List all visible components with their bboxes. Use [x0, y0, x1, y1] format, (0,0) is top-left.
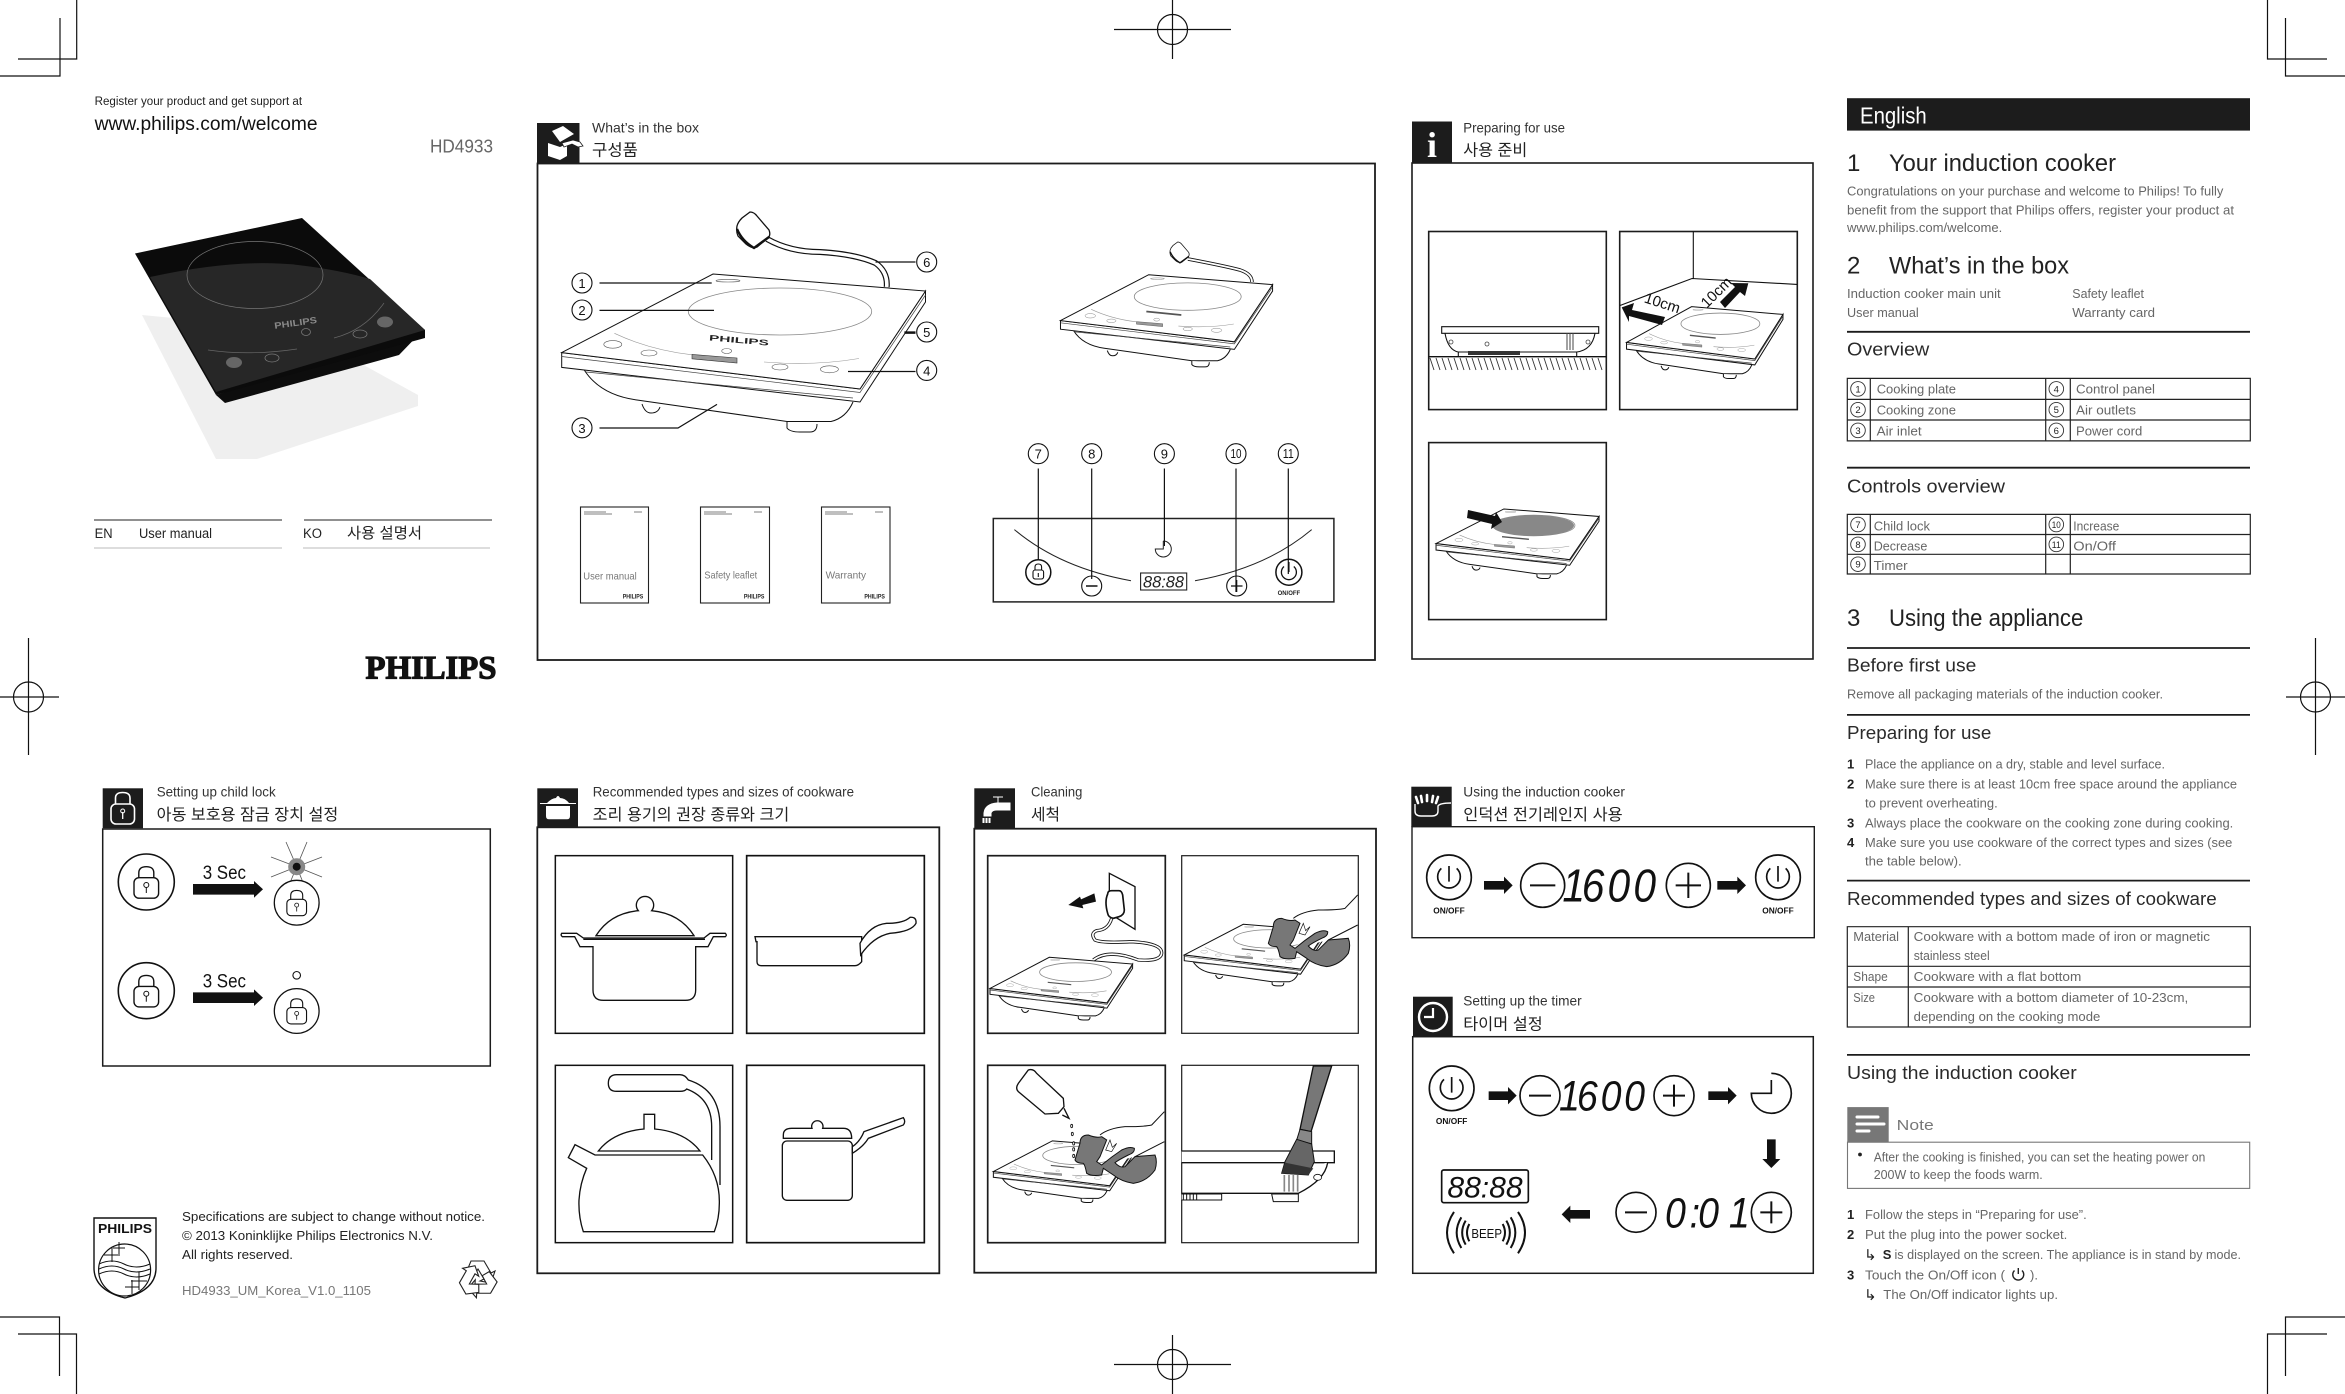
heading Korean: 인덕션 전기레인지 사용	[1463, 806, 1623, 824]
icon: tap	[974, 788, 1015, 828]
overview heading: Overview	[1847, 340, 1930, 360]
Philips shield: PHILIPS	[98, 1221, 152, 1236]
using steps: ↳	[1864, 1286, 1877, 1304]
icon: pan on flames	[1411, 787, 1452, 827]
step: cooking zone	[1429, 443, 1606, 620]
using steps: 2	[1847, 1227, 1854, 1242]
step: 10cm clearance: 10cm	[1698, 274, 1736, 312]
lock off sequence: 3 Sec	[203, 971, 246, 992]
overview table: 2	[1855, 405, 1861, 416]
icon: lock	[103, 788, 143, 828]
using steps: Follow the steps in “Preparing for use”.	[1865, 1207, 2087, 1222]
model number: HD4933	[430, 137, 493, 157]
overview table: 3	[1855, 426, 1861, 437]
heading English: Setting up the timer	[1463, 993, 1582, 1009]
box contents list: User manual	[1847, 305, 1919, 320]
preparing for use steps: Make sure there is at least 10cm free space around the appliance	[1865, 776, 2237, 791]
callouts 1 to 6: 1	[578, 276, 586, 291]
panel: cover	[94, 96, 500, 1303]
section 1 heading: 1	[1847, 150, 1860, 177]
icon: clock	[1413, 997, 1453, 1037]
callouts 1 to 6: 5	[923, 325, 930, 340]
panel: setting up the timer	[1413, 993, 1813, 1273]
preparing for use steps	[1847, 756, 2237, 868]
panel: English instructions	[1846, 98, 2250, 1304]
cookware table: Cookware with a bottom made of iron or magnetic	[1914, 929, 2211, 944]
controls overview table: 9	[1855, 560, 1861, 571]
lock on sequence	[118, 842, 322, 925]
booklet user manual: User manual	[583, 571, 637, 583]
section 1 body: www.philips.com/welcome.	[1846, 220, 2002, 235]
booklet warranty: PHILIPS	[864, 594, 885, 600]
icon: info: i	[1427, 125, 1437, 165]
cookware table: Shape	[1853, 969, 1888, 984]
section 2 heading: 2	[1847, 253, 1860, 280]
callouts 7 to 11: 7	[1035, 447, 1042, 462]
EN label: EN	[95, 526, 113, 541]
box contents list	[1847, 286, 2155, 320]
Philips shield	[94, 1218, 156, 1298]
using steps: The On/Off indicator lights up.	[1883, 1287, 2058, 1302]
overview table: Cooking plate	[1877, 381, 1956, 396]
heading Korean: 세척	[1031, 806, 1060, 824]
cookware table: Cookware with a flat bottom	[1914, 969, 2081, 984]
controls overview table: On/Off	[2073, 538, 2116, 553]
legal text: Specifications are subject to change without notice.	[182, 1209, 485, 1224]
panel frame	[1413, 1037, 1813, 1273]
step: level surface	[1429, 232, 1606, 410]
step: unplug	[988, 856, 1165, 1033]
product photo	[135, 218, 425, 459]
step: wipe with cloth	[1182, 856, 1358, 1033]
callouts 1 to 6	[572, 252, 937, 438]
controls overview table: Decrease	[1874, 538, 1927, 553]
step: brush air vents	[1182, 1065, 1358, 1243]
overview table: Air outlets	[2076, 402, 2137, 417]
preparing for use steps: 4	[1847, 835, 1855, 850]
kettle drawing	[555, 1065, 733, 1243]
operation sequence: ON/OFF	[1762, 905, 1794, 915]
panel: cleaning	[974, 784, 1376, 1273]
icon: pot	[537, 788, 578, 828]
heading Korean: 조리 용기의 권장 종류와 크기	[593, 806, 789, 824]
controls overview table: 11	[2052, 540, 2061, 551]
saucepan drawing	[747, 1065, 924, 1243]
heading English: Cleaning	[1031, 784, 1082, 800]
controls overview table: 8	[1855, 540, 1861, 551]
preparing for use steps: to prevent overheating.	[1865, 796, 1998, 811]
panel frame	[1412, 827, 1814, 938]
using steps: S	[1883, 1247, 1892, 1262]
operation sequence: 1600	[1562, 860, 1656, 912]
panel: recommended cookware	[537, 784, 939, 1273]
callouts 7 to 11: 9	[1161, 447, 1168, 462]
step: 10cm clearance: 10cm	[1642, 290, 1682, 317]
booklet user manual	[580, 507, 648, 603]
before first use: Before first use	[1847, 656, 1976, 676]
using steps: ↳	[1864, 1246, 1877, 1264]
overview table: Power cord	[2076, 423, 2142, 438]
heading Korean: 사용 준비	[1463, 142, 1527, 160]
box contents list: Safety leaflet	[2072, 286, 2144, 301]
section 1 body: Congratulations on your purchase and welcome to Philips! To fully	[1847, 183, 2224, 198]
panel frame	[103, 829, 490, 1066]
cookware table: Cookware with a bottom diameter of 10-23cm,	[1914, 990, 2188, 1005]
section 3 heading: 3	[1847, 605, 1860, 632]
callouts 1 to 6: 2	[578, 303, 586, 318]
timer sequence	[1429, 1066, 1791, 1253]
overview table: Control panel	[2076, 381, 2155, 396]
Philips wordmark: PHILIPS	[366, 651, 496, 687]
control panel diagram: 88:88	[1143, 572, 1185, 592]
heading Korean: 구성품	[592, 142, 638, 160]
lock off sequence	[118, 963, 319, 1033]
heading English: Recommended types and sizes of cookware	[593, 784, 854, 800]
preparing for use steps: 2	[1847, 776, 1854, 791]
preparing for use steps: Place the appliance on a dry, stable and level surface.	[1865, 756, 2165, 771]
main cooker diagram: PHILIPS	[709, 333, 770, 348]
timer sequence: 0:01	[1665, 1189, 1750, 1237]
booklet safety leaflet: PHILIPS	[744, 594, 764, 600]
using steps	[1847, 1207, 2241, 1304]
overview table: 4	[2054, 384, 2059, 395]
panel frame	[537, 827, 939, 1273]
operation sequence	[1427, 855, 1800, 915]
section 1 body	[1846, 183, 2234, 235]
callouts 7 to 11: 8	[1088, 447, 1095, 462]
panel: preparing for use	[1412, 120, 1813, 659]
using steps: 3	[1847, 1267, 1854, 1282]
legal text: © 2013 Koninklijke Philips Electronics N.V.	[182, 1228, 433, 1243]
register text: Register your product and get support at	[95, 96, 303, 108]
using steps: Put the plug into the power socket.	[1865, 1227, 2067, 1242]
frying pan drawing	[747, 856, 924, 1033]
frames and drawings	[555, 856, 924, 1243]
heading English: What’s in the box	[592, 120, 699, 136]
overview table: 1	[1855, 384, 1861, 395]
preparing for use steps: the table below).	[1865, 854, 1962, 868]
cookware heading: Recommended types and sizes of cookware	[1847, 889, 2217, 909]
callouts 7 to 11	[1028, 444, 1298, 592]
language rule lines	[94, 520, 492, 548]
panel frame	[538, 164, 1375, 660]
controls overview table: Increase	[2073, 519, 2119, 534]
note callout: 200W to keep the foods warm.	[1874, 1167, 2043, 1182]
callouts 1 to 6: 4	[923, 363, 930, 378]
controls overview table: 10	[2052, 520, 2061, 531]
control panel diagram: ON/OFF	[1278, 591, 1301, 597]
timer sequence: 88:88	[1447, 1171, 1523, 1204]
panel: setting up child lock	[103, 784, 490, 1066]
callouts 7 to 11: 11	[1283, 446, 1294, 461]
legal text: All rights reserved.	[182, 1247, 293, 1262]
panel: using the induction cooker	[1411, 784, 1814, 938]
box contents list: Warranty card	[2072, 305, 2155, 320]
box contents list: Induction cooker main unit	[1847, 286, 2001, 301]
cookware table: stainless steel	[1914, 948, 1990, 963]
heading Korean: 아동 보호용 잠금 장치 설정	[157, 806, 338, 824]
section 2 heading: What’s in the box	[1889, 253, 2069, 280]
User manual label: User manual	[139, 526, 212, 541]
document code: HD4933_UM_Korea_V1.0_1105	[182, 1283, 371, 1298]
product photo: PHILIPS	[274, 315, 318, 331]
note callout: Note	[1897, 1117, 1934, 1134]
using steps: 1	[1847, 1207, 1854, 1222]
cookware table	[1847, 927, 2250, 1027]
cookware table: depending on the cooking mode	[1914, 1009, 2100, 1024]
small cooker view	[1060, 242, 1273, 367]
using steps: ).	[2030, 1267, 2038, 1282]
timer sequence: BEEP	[1471, 1227, 1502, 1241]
heading English: Setting up child lock	[157, 784, 277, 800]
control panel diagram	[993, 518, 1334, 602]
booklet warranty	[822, 507, 890, 603]
overview table	[1847, 378, 2250, 441]
callouts 1 to 6: 6	[923, 255, 930, 270]
icon: info	[1412, 122, 1452, 165]
controls overview table	[1847, 514, 2250, 574]
heading English: Using the induction cooker	[1463, 784, 1625, 800]
recycle icon	[454, 1261, 500, 1303]
before first use: Remove all packaging materials of the induction cooker.	[1847, 687, 2163, 702]
section 3 heading: Using the appliance	[1889, 605, 2083, 632]
heading English: Preparing for use	[1463, 120, 1565, 136]
note callout: After the cooking is finished, you can set the heating power on	[1874, 1149, 2205, 1164]
lock on sequence: 3 Sec	[203, 863, 246, 884]
timer sequence: ON/OFF	[1436, 1116, 1467, 1126]
section 1 heading: Your induction cooker	[1889, 150, 2116, 177]
preparing for use steps: Make sure you use cookware of the correct types and sizes (see	[1865, 835, 2232, 850]
step: cleaning liquid	[988, 1065, 1165, 1243]
overview table: 5	[2054, 405, 2059, 416]
note callout	[1847, 1107, 2250, 1188]
using the induction cooker heading: Using the induction cooker	[1847, 1063, 2077, 1083]
preparing for use heading: Preparing for use	[1847, 723, 1991, 743]
panel frame	[1412, 163, 1813, 659]
controls overview table: Timer	[1874, 558, 1908, 573]
Korean user manual label: 사용 설명서	[347, 525, 422, 542]
legal text	[182, 1209, 485, 1262]
operation sequence: ON/OFF	[1433, 905, 1465, 915]
KO label: KO	[303, 526, 322, 541]
overview table: 6	[2054, 426, 2059, 437]
before first use	[1847, 648, 2250, 702]
step: 10cm clearance	[1620, 232, 1797, 410]
overview table: Air inlet	[1877, 423, 1922, 438]
overview table: Cooking zone	[1877, 402, 1956, 417]
controls overview table: 7	[1855, 520, 1861, 531]
callouts 1 to 6: 3	[578, 421, 586, 436]
language bar	[1847, 98, 2250, 131]
preparing for use steps: 3	[1847, 816, 1854, 831]
icon: opening box	[537, 123, 583, 164]
section 1 body: benefit from the support that Philips offers, register your product at	[1847, 202, 2234, 217]
using steps: is displayed on the screen. The appliance is in stand by mode.	[1894, 1247, 2241, 1262]
preparing for use steps: Always place the cookware on the cooking zone during cooking.	[1865, 816, 2233, 831]
panel frame	[974, 829, 1376, 1273]
panel: what's in the box	[537, 120, 1375, 660]
preparing for use steps: 1	[1847, 756, 1854, 771]
controls overview heading: Controls overview	[1847, 476, 2006, 496]
callouts 7 to 11: 10	[1230, 446, 1242, 461]
controls overview table: Child lock	[1874, 519, 1930, 534]
booklet user manual: PHILIPS	[623, 594, 643, 600]
timer sequence: 1600	[1559, 1072, 1646, 1120]
booklet safety leaflet: Safety leaflet	[704, 570, 757, 582]
booklet warranty: Warranty	[826, 570, 867, 582]
website url: www.philips.com/welcome	[94, 114, 318, 135]
cookware table: Size	[1853, 990, 1875, 1005]
language bar: English	[1860, 102, 1927, 128]
pot drawing	[555, 856, 733, 1033]
using steps: Touch the On/Off icon (	[1865, 1267, 2006, 1282]
heading Korean: 타이머 설정	[1463, 1015, 1543, 1033]
booklet safety leaflet	[700, 507, 770, 603]
cookware table: Material	[1853, 929, 1899, 944]
main cooker diagram	[562, 212, 926, 432]
